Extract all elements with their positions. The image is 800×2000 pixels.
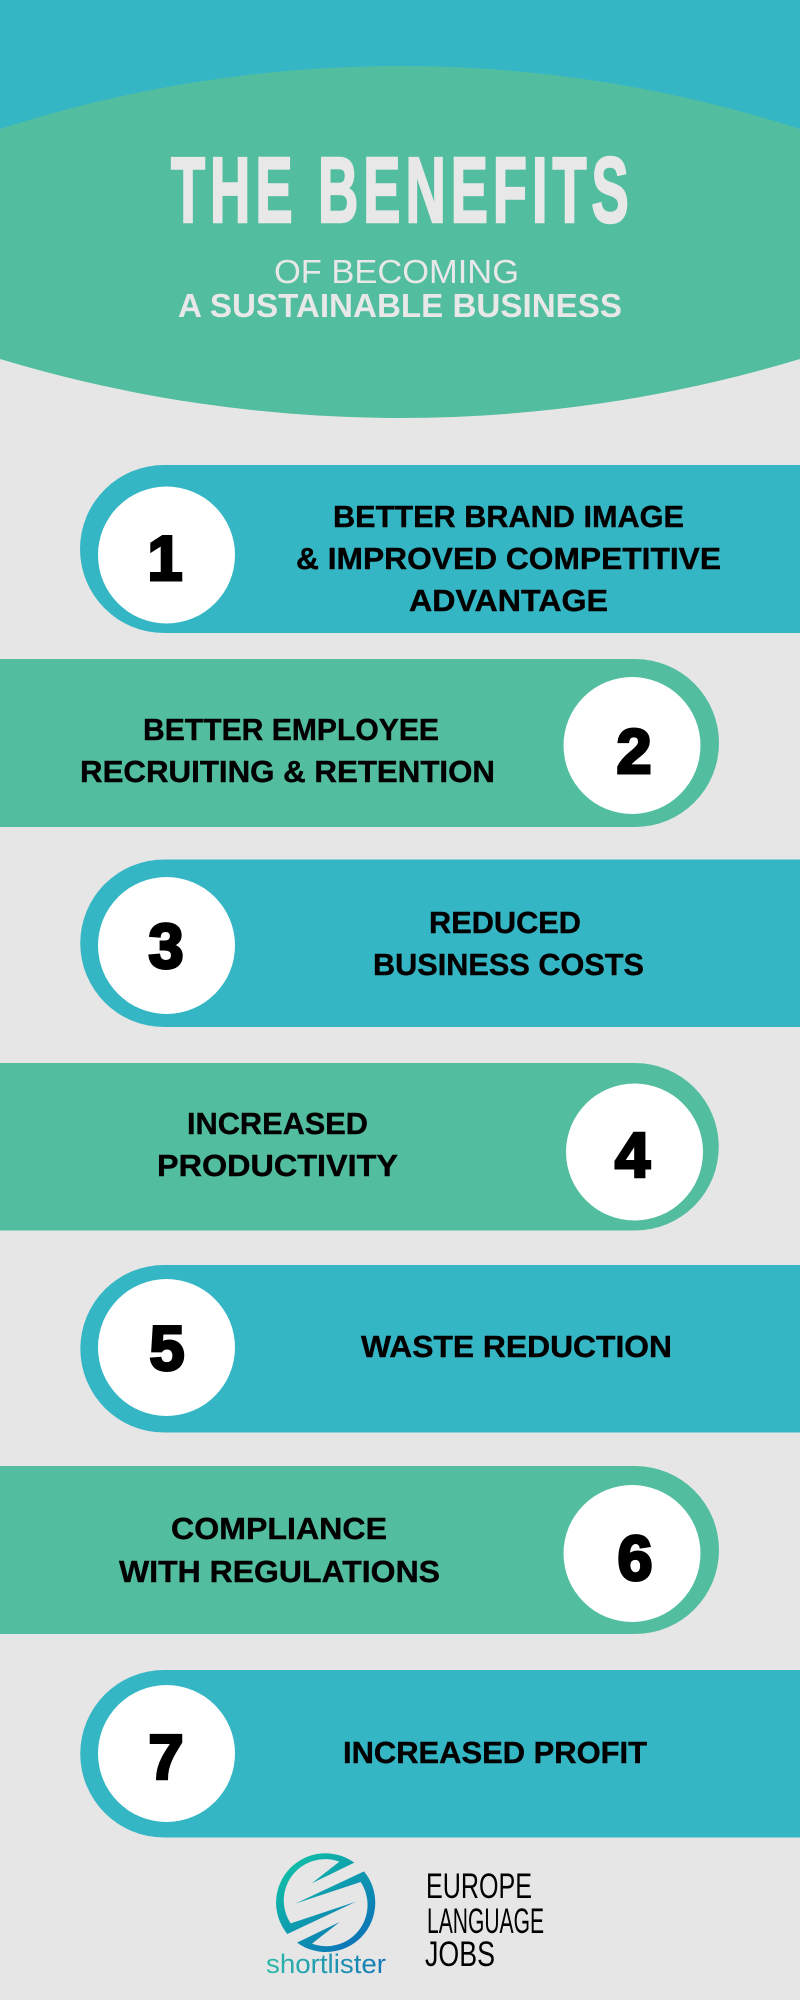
panel: benefit 6: [0, 1466, 719, 1634]
panel: benefit 5: [80, 1265, 800, 1432]
number circle 3: 3: [148, 912, 184, 982]
number circle 2: 2: [616, 717, 652, 787]
text: reduced business costs: [373, 905, 644, 982]
number circle 7: 7: [148, 1723, 184, 1793]
panel: benefit 2: [0, 659, 719, 827]
number circle 2: [564, 677, 700, 814]
title: THE BENEFITS: [171, 140, 634, 243]
text: compliance with regulations: WITH REGULATIONS: [119, 1554, 440, 1589]
number circle 4: 4: [615, 1121, 650, 1191]
header: green ellipse: [0, 66, 800, 418]
text: better brand image: ADVANTAGE: [409, 583, 608, 618]
text: increased profit: INCREASED PROFIT: [343, 1735, 647, 1770]
number circle 7: [98, 1685, 235, 1822]
text: compliance with regulations: [119, 1511, 440, 1589]
number circle 4: [566, 1084, 703, 1220]
text: better brand image: [296, 499, 721, 618]
shortlister wordmark: shortlister: [266, 1949, 386, 1979]
text: better employee: RECRUITING & RETENTION: [80, 754, 495, 789]
number circle 1: 1: [147, 524, 183, 594]
subtitle line 1: OF BECOMING: [274, 253, 519, 290]
number circle 1: [98, 486, 235, 624]
text: waste reduction: WASTE REDUCTION: [361, 1329, 672, 1364]
number circle 6: 6: [617, 1524, 653, 1594]
number circle 5: [98, 1279, 235, 1416]
text: reduced business costs: REDUCED: [429, 905, 581, 940]
logo: europe language jobs: EUROPE: [426, 1867, 532, 1906]
header: teal band: [0, 0, 800, 135]
text: better employee: BETTER EMPLOYEE: [143, 712, 439, 747]
panel: benefit 3: [80, 860, 800, 1027]
panel: benefit 4: [0, 1063, 719, 1230]
panel: benefit 7: [80, 1670, 800, 1838]
number circle 3: [98, 877, 235, 1014]
text: better employee: [80, 712, 495, 789]
panel: benefit 1: [80, 465, 800, 633]
number circle 6: [564, 1485, 700, 1622]
text: increased productivity: PRODUCTIVITY: [157, 1148, 398, 1183]
logo: europe language jobs: LANGUAGE: [427, 1902, 544, 1941]
number circle 5: 5: [149, 1314, 185, 1384]
subtitle line 2: A SUSTAINABLE BUSINESS: [178, 287, 622, 324]
text: better brand image: BETTER BRAND IMAGE: [333, 499, 684, 534]
text: increased productivity: INCREASED: [187, 1106, 368, 1141]
logo: shortlister: [266, 1853, 386, 1979]
logo: europe language jobs: [425, 1867, 544, 1974]
text: better brand image: & IMPROVED COMPETITIVE: [296, 541, 721, 576]
logo: europe language jobs: JOBS: [425, 1935, 495, 1974]
text: increased productivity: [157, 1106, 398, 1183]
text: compliance with regulations: COMPLIANCE: [171, 1511, 387, 1546]
icon: shortlister ring: [276, 1853, 375, 1952]
text: reduced business costs: BUSINESS COSTS: [373, 947, 644, 982]
